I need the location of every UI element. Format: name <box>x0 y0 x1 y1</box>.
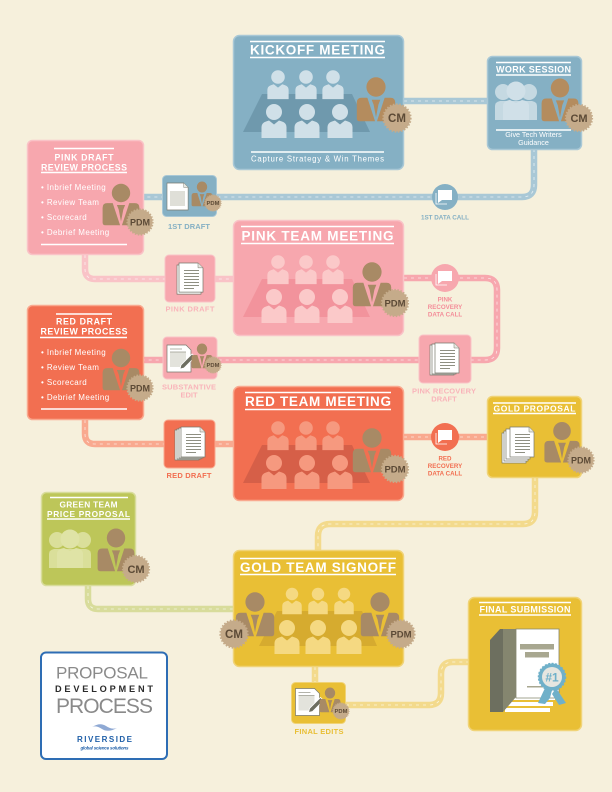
icon: red recovery data call <box>431 423 459 451</box>
label: pink recovery draft: PINK RECOVERY <box>412 386 476 396</box>
heading: PRICE PROPOSAL <box>47 509 130 519</box>
attendees <box>262 70 352 138</box>
heading: work session: WORK SESSION <box>496 64 571 74</box>
road: red team to gold proposal <box>404 434 488 440</box>
heading: GREEN TEAM <box>60 500 118 510</box>
label: pink recovery data call <box>428 296 463 318</box>
PDM figure <box>320 688 340 712</box>
road: red draft review to red draft <box>85 420 233 444</box>
bullet list: • Debrief Meeting <box>41 228 110 237</box>
road: green team to gold signoff <box>88 586 233 609</box>
table <box>243 94 370 132</box>
bullet list: • Debrief Meeting <box>41 393 110 402</box>
PDM figure <box>103 349 139 390</box>
CM figure <box>98 528 134 571</box>
bullet list: • Scorecard <box>41 213 87 222</box>
label: 1st draft: 1ST DRAFT <box>168 222 210 231</box>
bullet list: • Review Team <box>41 198 99 207</box>
PDM badge <box>387 620 415 648</box>
heading: RED TEAM MEETING <box>245 394 391 409</box>
label: pink draft: PINK DRAFT <box>166 304 215 314</box>
PDM badge: PDM <box>571 456 591 466</box>
panel: title logo <box>41 652 167 759</box>
label: substantive edit: EDIT <box>180 390 198 400</box>
heading: GOLD PROPOSAL <box>494 404 576 414</box>
icon: 1st data call <box>432 184 458 210</box>
heading: GOLD TEAM SIGNOFF <box>240 560 396 575</box>
icon: document stack <box>175 427 205 460</box>
PDM badge: PDM <box>130 384 150 394</box>
table <box>243 445 370 483</box>
PDM badge: PDM <box>390 630 412 640</box>
title: proposal development process: PROPOSAL <box>56 664 148 682</box>
bullet list: • Scorecard <box>41 378 87 387</box>
road: gold signoff to final edits <box>312 667 318 682</box>
icon: #1 ribbon: #1 <box>545 670 559 684</box>
PDM badge <box>382 290 408 316</box>
PDM figure <box>361 592 399 636</box>
CM figure <box>236 592 274 636</box>
attendees <box>262 255 352 323</box>
label: substantive edit: SUBSTANTIVE <box>162 382 216 392</box>
label: red recovery data call: RECOVERY <box>428 463 463 470</box>
CM badge <box>220 620 248 648</box>
label: pink recovery draft: DRAFT <box>431 394 457 404</box>
PDM badge: PDM <box>384 464 406 476</box>
icon: bound book <box>490 629 559 712</box>
PDM badge <box>382 456 408 482</box>
PDM figure <box>353 428 391 472</box>
road: work session to pink draft review <box>140 149 534 197</box>
CM badge: CM <box>127 564 145 576</box>
heading: RED DRAFT <box>56 316 113 326</box>
attendees <box>274 588 362 654</box>
panel: 1st draft <box>162 176 221 216</box>
panel: substantive edit <box>163 337 221 379</box>
PDM badge: PDM <box>335 709 348 715</box>
PDM figure <box>192 344 212 368</box>
bullet list: • Inbrief Meeting <box>41 183 106 192</box>
bullet list <box>41 183 110 237</box>
bullet list: • Review Team <box>41 363 99 372</box>
panel: final submission <box>468 598 582 730</box>
title: proposal development process: DEVELOPMENT <box>55 684 153 694</box>
title: proposal development process: PROCESS <box>56 695 153 718</box>
panel: work session <box>488 56 592 150</box>
heading <box>40 314 128 338</box>
heading: REVIEW PROCESS <box>40 326 128 336</box>
panel: green team price proposal <box>42 492 149 586</box>
bullet list <box>41 348 110 402</box>
icon: document stack <box>502 427 534 463</box>
PDM figure <box>103 184 139 225</box>
label: red recovery data call: DATA CALL <box>428 470 462 478</box>
label: pink recovery data call: DATA CALL <box>428 312 462 318</box>
icon: document <box>177 263 203 294</box>
heading: PINK TEAM MEETING <box>242 228 394 244</box>
table <box>243 279 370 317</box>
road: final edits to final submission <box>346 662 468 705</box>
label: substantive edit <box>162 382 216 400</box>
panel: final edits <box>292 682 349 724</box>
label: red draft: RED DRAFT <box>166 471 212 480</box>
panel: pink draft review process <box>28 140 153 254</box>
caption: Guidance <box>518 138 549 147</box>
label: red recovery data call: RED <box>438 456 452 462</box>
icon: document <box>167 183 188 210</box>
label: red recovery data call <box>428 456 463 478</box>
PDM badge: PDM <box>207 363 220 369</box>
bullet list: • Inbrief Meeting <box>41 348 106 357</box>
logo: riverside: global science solutions <box>80 746 129 750</box>
label: pink recovery data call: PINK <box>438 296 453 304</box>
PDM figure <box>353 262 391 306</box>
PDM badge: PDM <box>207 201 220 207</box>
PDM figure <box>192 182 212 206</box>
CM figure <box>542 78 578 121</box>
label: pink recovery draft <box>412 386 476 404</box>
road: gold proposal to gold signoff <box>318 478 535 550</box>
panel: pink recovery draft <box>419 335 471 383</box>
title: proposal development process <box>55 664 153 718</box>
heading <box>47 498 130 519</box>
logo: riverside <box>77 724 133 750</box>
PDM badge: PDM <box>384 298 406 310</box>
road: kickoff to work session <box>404 98 487 104</box>
label: 1st data call: 1ST DATA CALL <box>421 214 469 222</box>
panel: gold proposal <box>488 396 594 478</box>
CM badge <box>383 104 411 132</box>
heading: REVIEW PROCESS <box>41 162 127 172</box>
panel: gold team signoff <box>220 550 415 666</box>
panel: red draft review process <box>28 306 153 420</box>
heading: kickoff meeting: KICKOFF MEETING <box>250 42 385 58</box>
attendees <box>262 421 352 489</box>
panel: red draft <box>164 420 215 468</box>
table <box>259 611 377 646</box>
caption: Give Tech Writers <box>505 130 562 139</box>
CM badge: CM <box>225 629 243 641</box>
panel: pink team meeting <box>234 220 408 336</box>
icon: pink recovery data call <box>431 264 459 292</box>
logo: riverside: RIVERSIDE <box>77 735 133 744</box>
group figure <box>49 530 91 568</box>
road: pink draft review to pink draft <box>85 255 233 279</box>
icon: document with pencil <box>296 688 324 716</box>
heading <box>41 148 127 172</box>
CM badge: CM <box>570 113 588 125</box>
heading: PINK DRAFT <box>54 152 114 162</box>
PDM badge: PDM <box>130 218 150 228</box>
icon: document stack <box>430 343 459 375</box>
label: final edits: FINAL EDITS <box>294 727 344 736</box>
label: pink recovery data call: RECOVERY <box>428 304 463 311</box>
road: pink team to pink recovery to substantive edit <box>144 278 497 360</box>
CM figure <box>357 77 395 121</box>
panel: pink draft <box>165 255 215 302</box>
PDM figure <box>544 422 580 462</box>
caption <box>496 130 571 147</box>
heading: FINAL SUBMISSION <box>480 604 570 614</box>
panel: red team meeting <box>234 386 408 500</box>
panel: kickoff meeting <box>234 36 411 170</box>
writers group <box>495 82 537 120</box>
CM badge: CM <box>388 113 406 125</box>
caption: Capture Strategy & Win Themes <box>251 154 384 164</box>
icon: document with pencil <box>167 345 195 372</box>
